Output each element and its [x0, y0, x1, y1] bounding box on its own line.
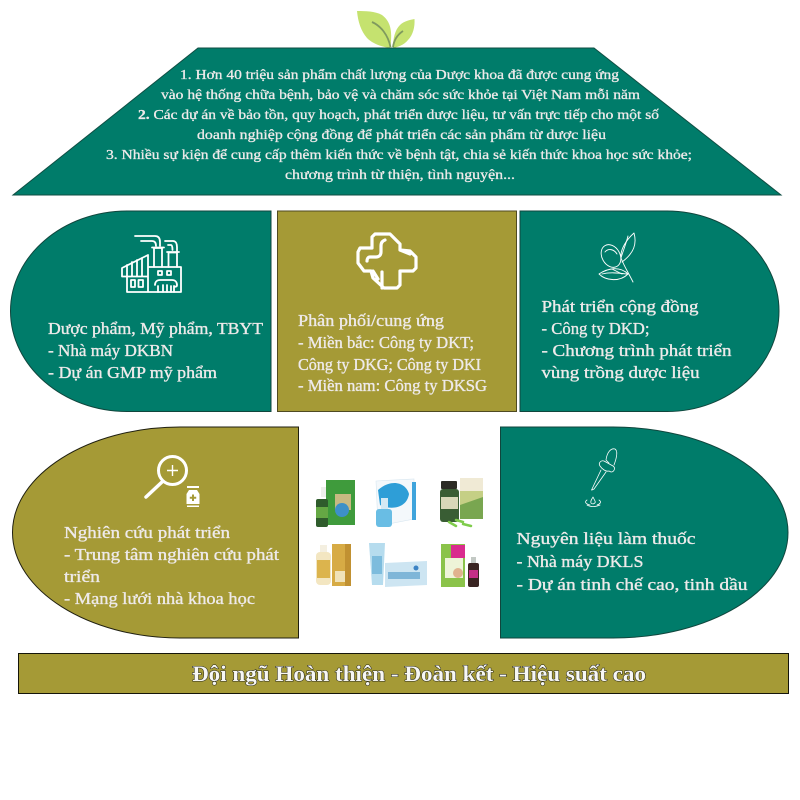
text: achievements: vào hệ thống chữa bệnh, bảo vệ và chăm sóc sức khỏe tại Việt Nam mỗi năm — [161, 88, 640, 103]
text: research: Nghiên cứu phát triển — [64, 523, 231, 542]
text: research: triển — [64, 567, 101, 586]
text: community: - Chương trình phát triển — [542, 341, 732, 360]
text: distribution: Phân phối/cung ứng — [298, 311, 445, 330]
text: distribution — [298, 311, 487, 395]
product: syrup box and bottle — [441, 544, 479, 587]
text: raw materials: - Dự án tinh chế cao, tinh dầu — [516, 575, 748, 594]
icon: medical cross — [358, 234, 416, 288]
text: distribution: Công ty DKG; Công ty DKI — [298, 355, 481, 374]
icon: dropper — [586, 449, 617, 506]
text: community — [542, 297, 732, 382]
product: golden bottle and box — [316, 544, 351, 586]
text: distribution: - Miền bắc: Công ty DKT; — [298, 333, 474, 352]
panel: top trapezoid — [13, 48, 781, 195]
text: raw materials — [516, 529, 748, 594]
group: product images — [316, 478, 483, 587]
text: raw materials: Nguyên liệu làm thuốc — [516, 529, 696, 548]
panel: pharma manufacturing — [10, 211, 271, 412]
banner text: Đội ngũ Hoàn thiện - Đoàn kết - Hiệu suất cao — [192, 661, 646, 686]
panel: distribution — [278, 211, 516, 412]
text: achievements: 1. Hơn 40 triệu sản phẩm chất lượng của Dược khoa đã được cung ứng — [180, 68, 619, 83]
text: community: vùng trồng dược liệu — [542, 363, 700, 382]
product: blue tube and box — [369, 543, 427, 587]
text: pharma: Dược phẩm, Mỹ phẩm, TBYT — [48, 319, 264, 338]
icon: factory — [122, 236, 181, 292]
text: achievements — [106, 68, 692, 183]
text: research: - Trung tâm nghiên cứu phát — [64, 545, 279, 564]
text: achievements: doanh nghiệp cộng đồng để phát triển các sản phẩm từ dược liệu — [197, 128, 606, 143]
panel: raw materials — [500, 427, 788, 638]
text: community: Phát triển cộng đồng — [542, 297, 699, 316]
icon: magnifier and bottle — [146, 456, 200, 507]
panel: research and development — [12, 427, 298, 638]
text: pharma: - Nhà máy DKBN — [48, 341, 173, 360]
text: pharma: - Dự án GMP mỹ phẩm — [48, 363, 217, 382]
product: green box and dropper — [316, 480, 355, 527]
icon: sprout — [357, 11, 415, 48]
text: pharma — [48, 319, 264, 382]
text: community: - Công ty DKD; — [542, 319, 650, 338]
text: distribution: - Miền nam: Công ty DKSG — [298, 376, 487, 395]
product: herbal jar and box — [440, 478, 483, 526]
text: research — [64, 523, 279, 608]
text: research: - Mạng lưới nhà khoa học — [64, 589, 255, 608]
banner: team — [18, 654, 788, 694]
text: raw materials: - Nhà máy DKLS — [516, 552, 644, 571]
panel: community development — [520, 211, 779, 412]
text: achievements: 2. Các dự án về bảo tồn, quy hoạch, phát triển dược liệu, tư vấn trực tiếp cho một số — [138, 108, 659, 123]
icon: leaf branch — [597, 233, 635, 282]
product: blue eye drops — [376, 479, 416, 527]
text: achievements: 3. Nhiều sự kiện để cung cấp thêm kiến thức về bệnh tật, chia sẻ kiến thức khoa học sức khỏe; — [106, 148, 692, 163]
text: achievements: chương trình từ thiện, tình nguyện... — [285, 168, 515, 183]
